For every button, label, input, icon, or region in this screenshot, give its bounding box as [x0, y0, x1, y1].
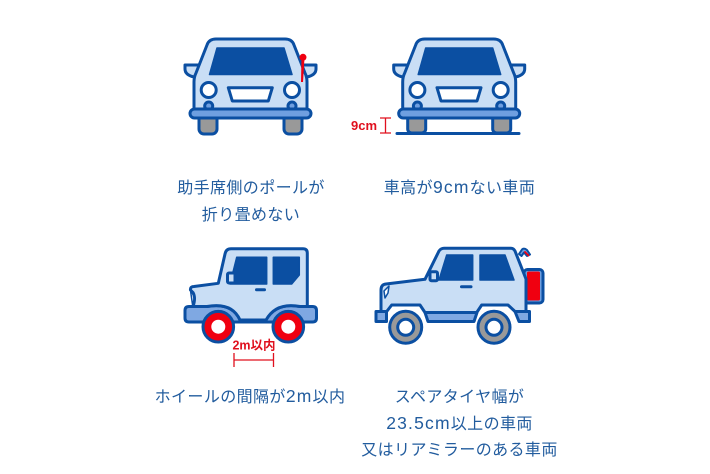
caption: spare tyre: [361, 388, 558, 459]
caption: clearance: 車高が9cmない車両: [384, 177, 535, 197]
caption: spare tyre: スペアタイヤ幅が: [395, 389, 524, 406]
icon: side jeep with red wheels: [185, 249, 316, 342]
caption: pole: 折り畳めない: [202, 207, 300, 224]
icon: side SUV with spare tyre and rear mirror: [376, 248, 543, 343]
label: 2m wheelbase marker: 2m以内: [232, 338, 276, 352]
icon: front car with low clearance: [394, 39, 525, 134]
caption: spare tyre: 又はリアミラーのある車両: [361, 442, 558, 459]
label: 9cm height marker: [351, 118, 391, 133]
caption: pole: [177, 179, 325, 224]
icon: front car with pole: [185, 39, 316, 134]
label: 9cm height marker: 9cm: [351, 118, 377, 133]
label: 2m wheelbase marker: [232, 338, 276, 367]
caption: spare tyre: 23.5cm以上の車両: [386, 413, 533, 433]
caption: wheelbase: ホイールの間隔が2m以内: [155, 386, 345, 406]
caption: pole: 助手席側のポールが: [177, 180, 325, 197]
icon: red pole: [300, 54, 306, 82]
